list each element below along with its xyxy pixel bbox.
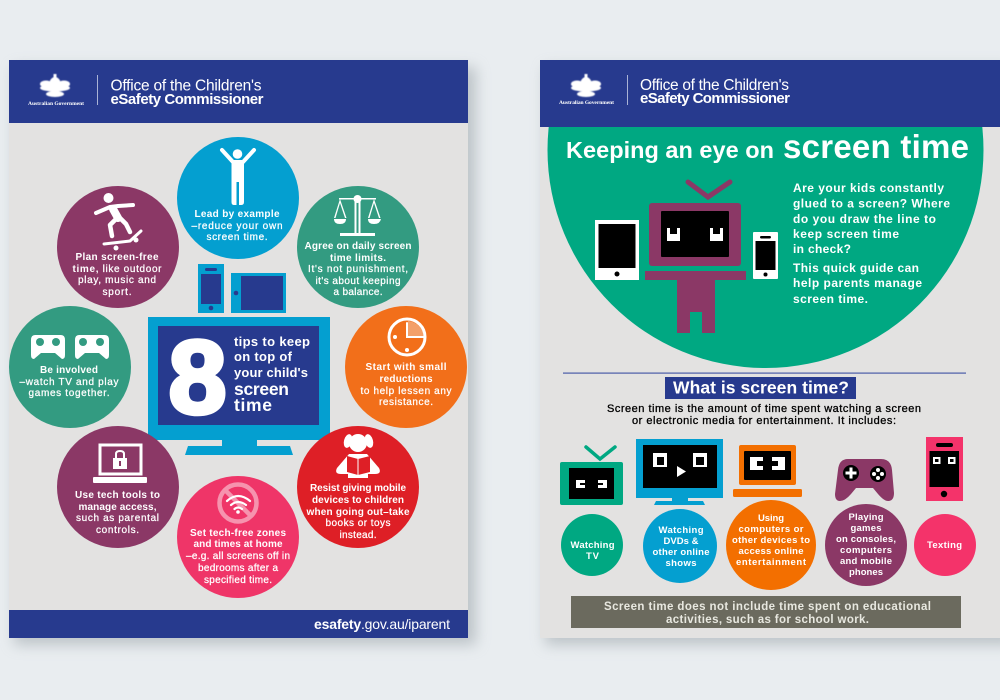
badge: watching TV: Watching [570, 540, 615, 551]
tip: tech-free zones: –e.g. all screens off in [186, 551, 290, 562]
badge: playing games: games [850, 523, 882, 534]
badge: using computers: Using [758, 513, 784, 524]
intro text: do you draw the line to [793, 212, 936, 226]
tip: agree on daily limits: it's about keeping [316, 276, 400, 287]
tip: tech-free zones: bedrooms after a [198, 563, 278, 574]
tip: start with small reductions [345, 306, 467, 428]
badge: watching TV [561, 514, 623, 576]
title [566, 128, 969, 165]
intro text: Are your kids constantly [793, 181, 944, 195]
tip: resist giving devices: devices to children [312, 495, 404, 506]
tip: be involved: games together. [28, 388, 110, 399]
icon: game controllers [31, 335, 109, 359]
tip: lead by example: Lead by example [194, 209, 280, 220]
icon: phone [753, 232, 778, 279]
header: left poster: eSafety Commissioner [110, 91, 264, 108]
icon: blue TV [636, 439, 723, 505]
badge: playing games: and mobile [840, 556, 892, 567]
badge: playing games: Playing [848, 512, 884, 523]
tip: resist giving devices: Resist giving mobile [310, 483, 406, 494]
badge: watching DVDs [643, 509, 717, 583]
tip: plan screen-free time: Plan screen-free [76, 252, 159, 263]
icon: girl reading [336, 433, 380, 478]
header: left poster: Australian Government [28, 101, 84, 107]
icon: scales [334, 195, 381, 236]
tip: resist giving devices: instead. [340, 530, 376, 541]
tip: lead by example: screen time. [206, 232, 268, 243]
icon: no wifi [220, 484, 256, 522]
badge: texting [914, 514, 976, 576]
icon: tablet [231, 273, 286, 313]
title: Keeping an eye on [566, 137, 774, 163]
TV: 8 tips heading [148, 317, 330, 455]
badge: using computers [726, 500, 816, 590]
TV: 8 tips heading: your child's [234, 365, 308, 380]
intro text: in check? [793, 242, 851, 256]
badge: playing games: computers [840, 545, 892, 556]
icon: clock [389, 319, 425, 355]
badge: using computers: access online [738, 546, 804, 557]
panel: left poster [9, 60, 476, 645]
tip: start with small reductions: resistance. [379, 397, 433, 408]
intro text [793, 181, 950, 306]
tip: agree on daily limits: It's not punishment, [308, 264, 408, 275]
tip: tech-free zones: specified time. [204, 575, 272, 586]
tip: lead by example [177, 137, 299, 259]
header: right poster: Office of the Children's [640, 77, 789, 94]
TV: 8 tips heading: screen [234, 379, 289, 399]
tip: use tech tools: such as parental [76, 513, 159, 524]
badge: watching DVDs: Watching [658, 525, 704, 536]
badge: using computers: entertainment [736, 557, 807, 568]
tip: resist giving devices: when going out–take [306, 507, 410, 518]
header: right poster: eSafety Commissioner [640, 90, 790, 107]
icon: orange laptop [733, 445, 802, 497]
badge: watching DVDs: other online [652, 547, 710, 558]
intro text: This quick guide can [793, 261, 919, 275]
tip: be involved [9, 306, 131, 428]
tip: start with small reductions: to help lessen any [360, 386, 452, 397]
tip: use tech tools: controls. [96, 525, 139, 536]
icon: skateboarder [96, 193, 141, 250]
tip: resist giving devices: books or toys [326, 518, 390, 529]
note: exclusions [571, 596, 961, 628]
header: left poster: Office of the Children's [110, 78, 262, 94]
icon: game controller [835, 459, 894, 501]
tip: tech-free zones: Set tech-free zones [190, 528, 286, 539]
title: screen time [783, 128, 969, 165]
tip: use tech tools: manage access, [78, 502, 157, 513]
icon: tablet [595, 220, 639, 280]
TV: 8 tips heading: 8 [169, 320, 226, 436]
tip: plan screen-free time: play, music and [78, 275, 156, 286]
header: left poster [9, 60, 468, 123]
icon: TV robot [645, 182, 746, 333]
badge: watching TV: TV [586, 551, 600, 562]
definition text [607, 403, 921, 427]
icon: laptop with lock [93, 445, 147, 483]
footer: web address [9, 610, 468, 638]
footer: web address: esafety.gov.au/iparent [314, 616, 450, 632]
badge: watching DVDs: shows [666, 558, 696, 569]
tip: resist giving devices [297, 426, 419, 548]
header: right poster [540, 60, 1000, 127]
badge: using computers: other devices to [732, 535, 810, 546]
tip: lead by example: –reduce your own [192, 221, 282, 232]
tip: use tech tools: Use tech tools to [75, 490, 160, 501]
intro text: keep screen time [793, 227, 899, 241]
header: right poster: Australian Government [559, 100, 614, 106]
panel: right poster [540, 0, 1000, 645]
tip: agree on daily limits: time limits. [330, 253, 386, 264]
tip: agree on daily limits: a balance. [334, 287, 382, 298]
icon: person with raised arms [222, 149, 254, 205]
green semicircle [548, 127, 984, 368]
definition text: or electronic media for entertainment. It includes: [632, 415, 896, 427]
tip: be involved: Be involved [40, 365, 98, 376]
badge: using computers: computers or [738, 524, 804, 535]
tip: plan screen-free time: time, like outdoor [72, 264, 162, 275]
intro text: screen time. [793, 292, 868, 306]
tip: agree on daily limits [297, 186, 419, 308]
tip: start with small reductions: reductions [380, 374, 433, 385]
icon: green TV [560, 447, 623, 505]
badge: watching DVDs: DVDs & [664, 536, 699, 547]
badge: playing games: on consoles, [836, 534, 896, 545]
tip: agree on daily limits: Agree on daily screen [304, 241, 412, 252]
tip: use tech tools [57, 426, 179, 548]
tip: tech-free zones: and times at home [194, 539, 283, 550]
note: exclusions: Screen time does not include time spent on educational [604, 601, 931, 613]
icon: phone [198, 264, 224, 313]
icon: pink phone [926, 437, 963, 501]
TV: 8 tips heading: time [234, 395, 272, 415]
TV: 8 tips heading: on top of [234, 349, 293, 364]
definition text: Screen time is the amount of time spent watching a screen [607, 403, 921, 415]
heading: what is screen time: What is screen time? [673, 378, 849, 398]
tip: plan screen-free time: sport. [102, 287, 132, 298]
badge: playing games: phones [849, 567, 883, 578]
note: exclusions: activities, such as for school work. [666, 614, 869, 626]
badge: texting: Texting [927, 540, 962, 551]
tip: tech-free zones [177, 476, 299, 598]
tip: start with small reductions: Start with small [366, 362, 447, 373]
tip: plan screen-free time [57, 186, 179, 308]
TV: 8 tips heading: tips to keep [234, 334, 310, 349]
intro text: glued to a screen? Where [793, 196, 950, 210]
tip: be involved: –watch TV and play [20, 377, 118, 388]
badge: playing games [825, 504, 907, 586]
intro text: help parents manage [793, 276, 922, 290]
